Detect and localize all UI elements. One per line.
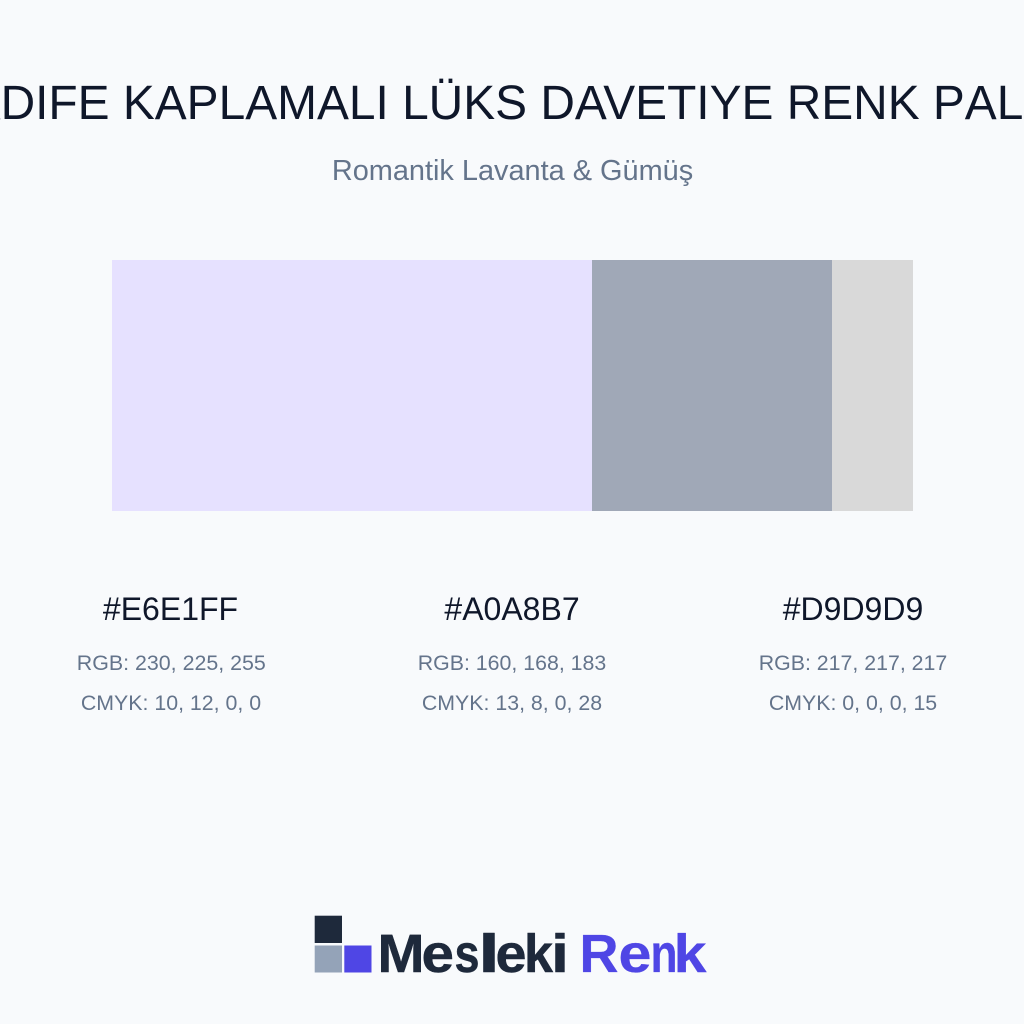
color info: lavender <box>77 591 266 715</box>
logo wordmark: e <box>496 924 526 984</box>
rgb value: RGB: 217, 217, 217 <box>759 651 947 675</box>
logo wordmark: M <box>378 924 424 984</box>
cmyk value: CMYK: 0, 0, 0, 15 <box>769 691 937 715</box>
color info: silver blue-gray <box>418 591 606 715</box>
logo wordmark: k <box>674 924 708 984</box>
color info: light gray <box>759 591 947 715</box>
palette bar <box>112 260 913 511</box>
logo wordmark: e <box>618 924 652 984</box>
hex code: #E6E1FF <box>103 591 238 627</box>
logo wordmark: n <box>650 924 678 984</box>
swatch: lavender <box>112 260 592 511</box>
rgb value: RGB: 160, 168, 183 <box>418 651 606 675</box>
hex code: #D9D9D9 <box>783 591 923 627</box>
rgb value: RGB: 230, 225, 255 <box>77 651 266 675</box>
logo wordmark: l <box>478 924 500 984</box>
icon: logo squares <box>315 916 372 972</box>
logo wordmark: s <box>454 924 480 984</box>
logo wordmark: i <box>551 924 569 984</box>
swatch: silver blue-gray <box>592 260 832 511</box>
hex code: #A0A8B7 <box>444 591 580 627</box>
swatch: light gray <box>832 260 913 511</box>
subtitle: Romantik Lavanta & Gümüş <box>332 155 693 187</box>
logo wordmark: e <box>422 924 454 984</box>
cmyk value: CMYK: 10, 12, 0, 0 <box>81 691 261 715</box>
cmyk value: CMYK: 13, 8, 0, 28 <box>422 691 602 715</box>
logo wordmark: k <box>524 924 554 984</box>
logo wordmark: R <box>580 924 618 984</box>
logo <box>315 916 708 984</box>
